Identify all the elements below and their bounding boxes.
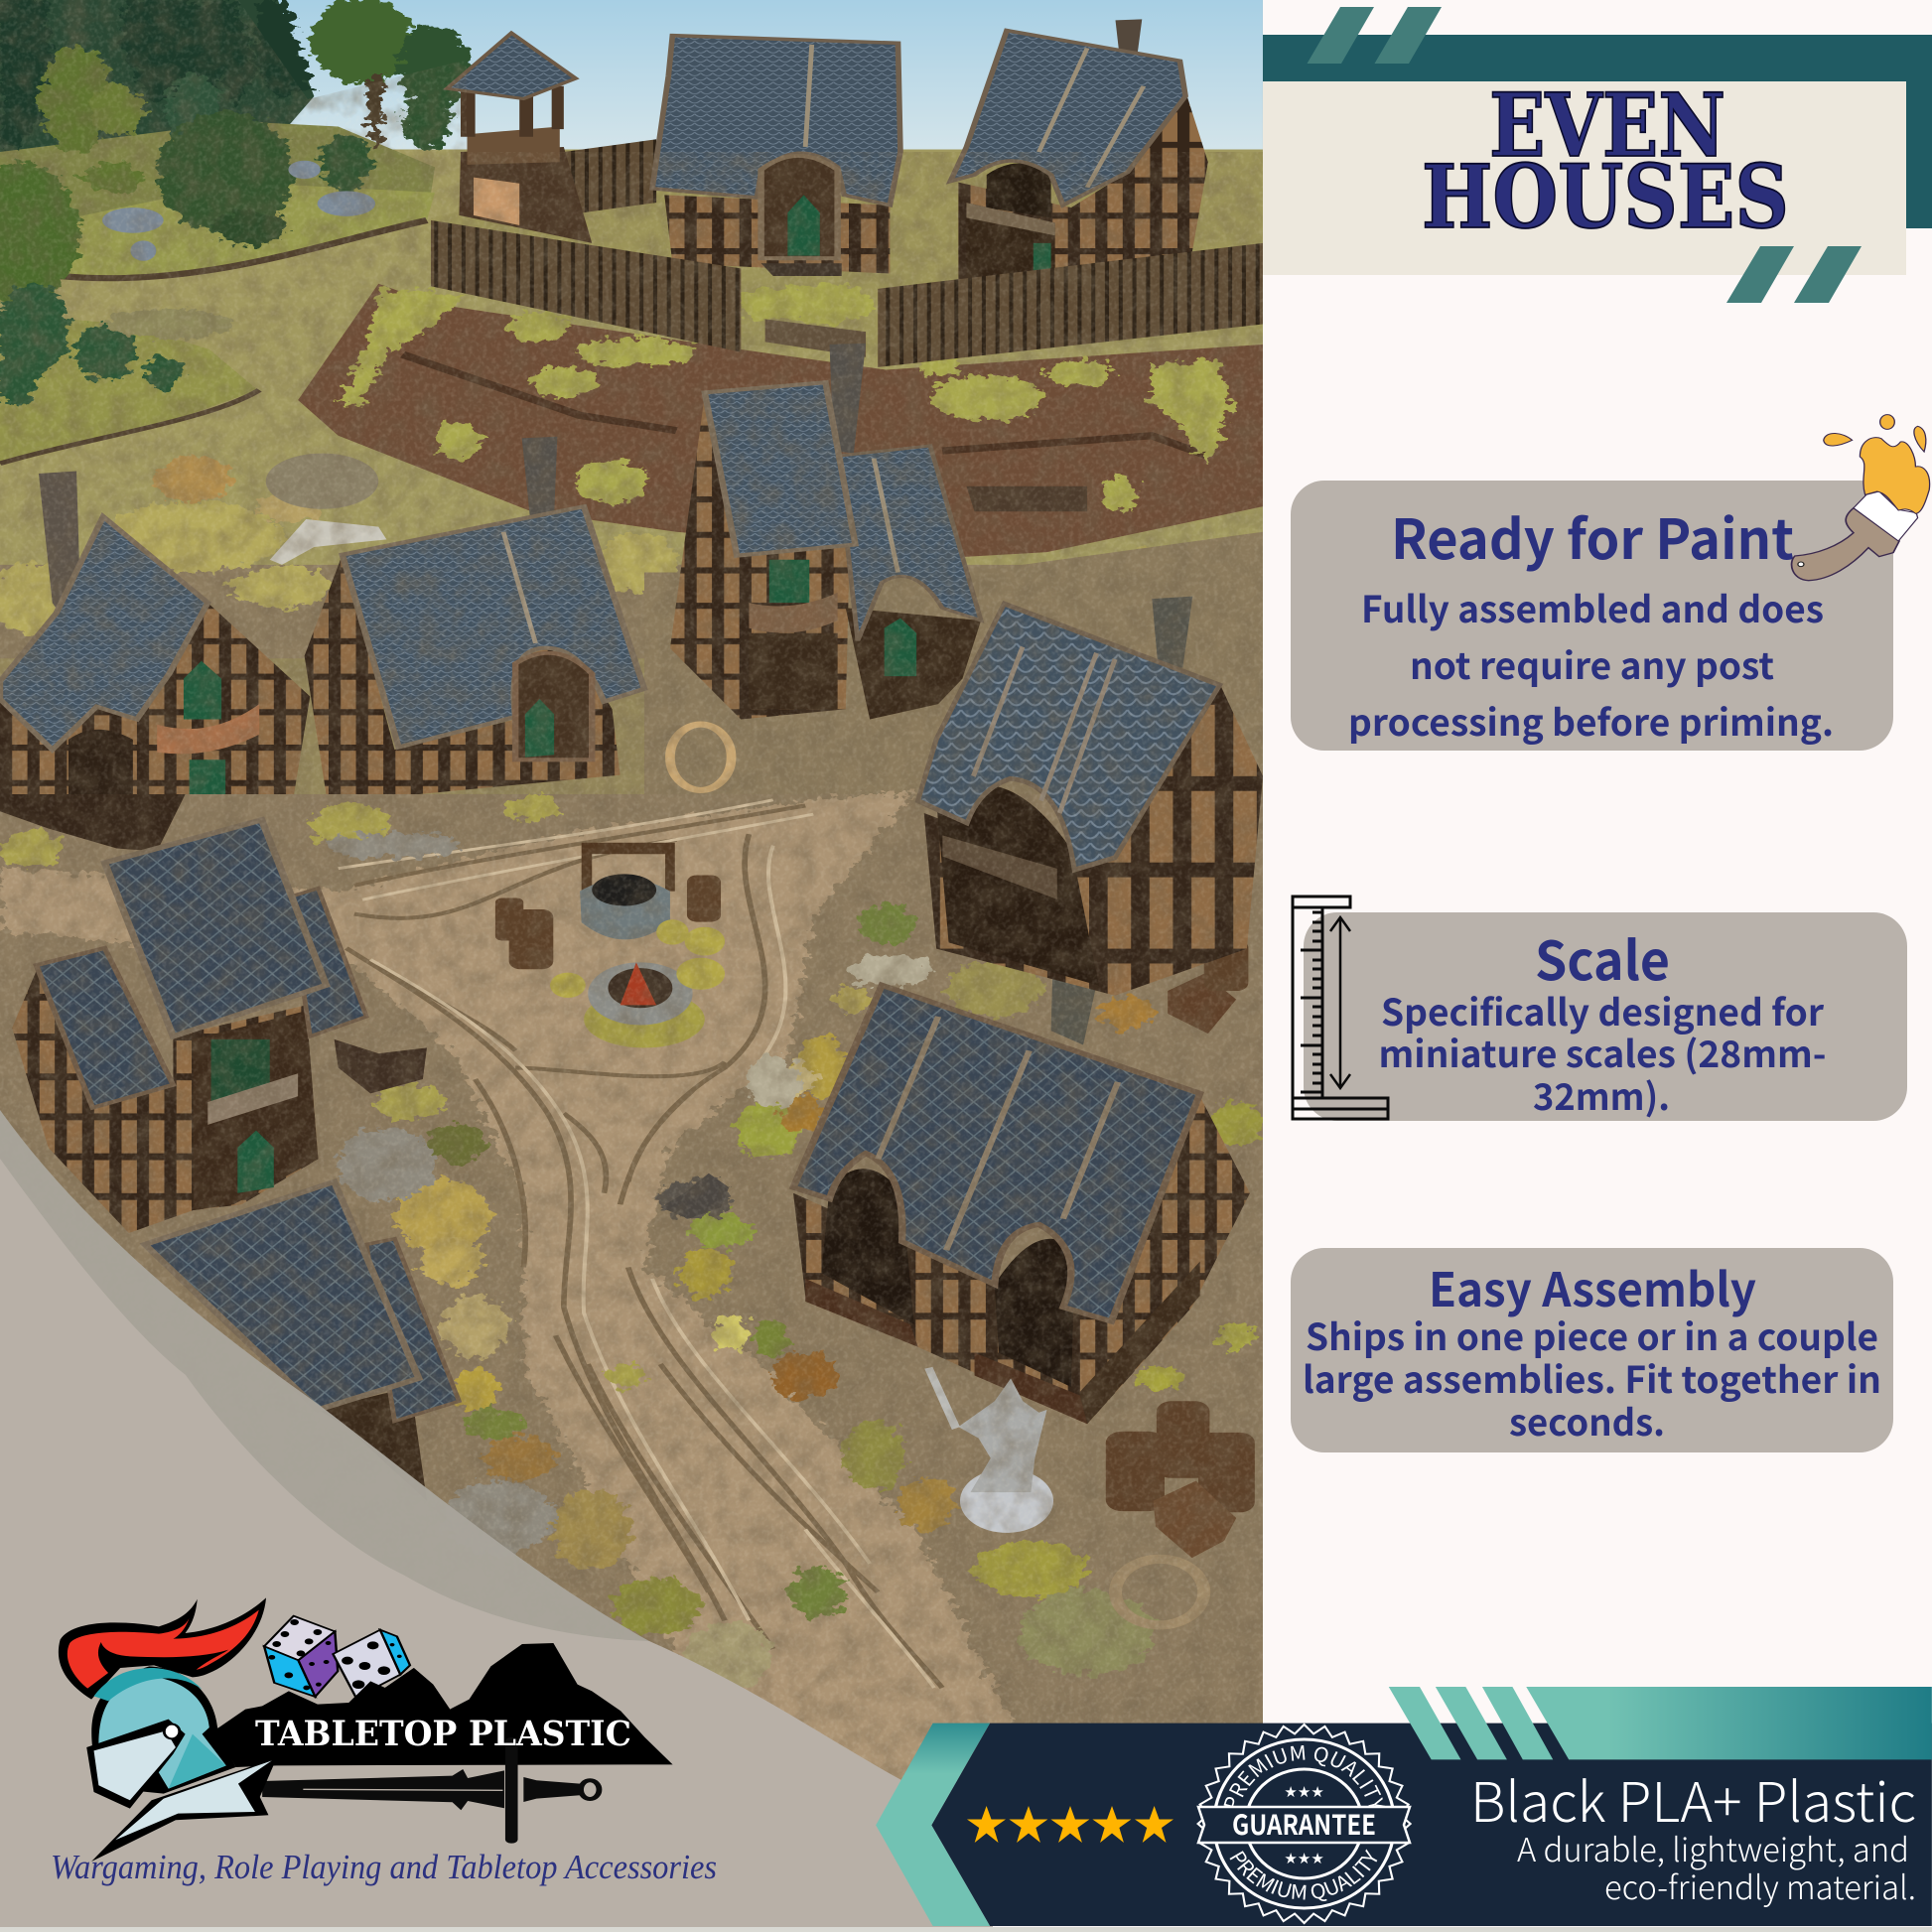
forest backdrop: [0, 0, 314, 152]
meadow patches: [0, 309, 1248, 755]
title line two: HOUSES: [1422, 145, 1789, 248]
lower-left grass bank: [0, 314, 258, 461]
fire grass: [584, 991, 705, 1047]
palisade left: [431, 220, 741, 352]
die two pips: [342, 1641, 402, 1689]
body text: 32mm).: [1533, 1067, 1670, 1121]
panel: easy assembly: [1291, 1248, 1893, 1452]
rope coil: [670, 725, 732, 790]
bottom banner: [0, 1687, 1932, 1932]
rear roof: [838, 446, 981, 640]
badge text bottom: PREMIUM QUALITY: [1229, 1849, 1378, 1901]
roof: [343, 506, 644, 748]
small stars top: ★★★: [1284, 1783, 1324, 1801]
house: back middle: [652, 36, 900, 276]
stones by road: [660, 1173, 729, 1219]
balcony: [157, 704, 259, 754]
tufts and stones: [0, 794, 1263, 1689]
walls: [793, 1096, 1250, 1424]
title banner: [1263, 7, 1932, 303]
miniature base: [960, 1469, 1053, 1533]
rear roof: [290, 889, 366, 1036]
body text: not require any post: [1410, 636, 1774, 690]
ground lower left: [0, 658, 644, 794]
back terrain and trees: [0, 0, 1263, 794]
die one left: [264, 1646, 315, 1697]
logo artwork: [59, 1597, 673, 1862]
photo: miniature village diorama: [0, 0, 1263, 1792]
body text: [1348, 580, 1834, 747]
paint: [1860, 438, 1930, 513]
door: [184, 661, 221, 719]
house: centre tall: [670, 344, 981, 719]
walls: [318, 1387, 427, 1501]
visor: [86, 1720, 186, 1809]
campfire: [584, 962, 705, 1047]
conifer trees: [0, 0, 313, 147]
helmet shell: [98, 1676, 226, 1789]
grass around well: [550, 919, 725, 998]
material description: A durable, lightweight, and: [1517, 1824, 1909, 1871]
arch and door: [515, 653, 592, 759]
barrels and crate: [1106, 1401, 1255, 1558]
ground tone: [0, 794, 1263, 1791]
sword blade: [262, 1769, 504, 1810]
balcony: [942, 835, 1057, 899]
yard inside palisade: [1263, 152, 1264, 157]
terrain noise: [0, 0, 1263, 1787]
walls: [0, 603, 310, 794]
solid swoosh: [0, 1159, 993, 1928]
earth mound: [298, 284, 1263, 557]
panel background: [1291, 481, 1893, 751]
plume red: [68, 1610, 259, 1689]
barrels by well: [495, 876, 721, 969]
heading: Scale: [1535, 917, 1670, 996]
house: upper right rear props: [1168, 974, 1236, 1034]
balcony: [207, 1073, 298, 1125]
material heading: Black PLA+ Plastic: [1470, 1758, 1916, 1838]
pommel: [581, 1780, 599, 1799]
walls: [958, 86, 1208, 291]
guarantee word: GUARANTEE: [1232, 1804, 1376, 1844]
brand name: TABLETOP PLASTIC: [255, 1714, 631, 1754]
well frame: [582, 843, 675, 892]
roof: [652, 36, 900, 206]
panel: ready for paint: [1291, 415, 1930, 751]
house: left centre: [305, 437, 644, 794]
die two: [333, 1630, 410, 1698]
heading: Ready for Paint: [1391, 495, 1794, 575]
sword guard: [505, 1737, 518, 1844]
brush handle: [1792, 508, 1899, 581]
arch: [761, 156, 838, 258]
die one pips: [268, 1619, 331, 1690]
corner swoosh: [0, 1110, 993, 1928]
road ruts: [346, 805, 942, 1688]
ground base: [0, 0, 1263, 1787]
rear roof: [366, 1239, 459, 1421]
well stone: [580, 879, 670, 939]
body text: large assemblies. Fit together in: [1303, 1350, 1881, 1404]
well: [580, 843, 675, 939]
house: lower left tall: [12, 820, 366, 1233]
wooded hill: [0, 121, 435, 304]
chimney: [39, 471, 80, 621]
die two front: [333, 1630, 400, 1698]
material description: eco-friendly material.: [1604, 1862, 1916, 1909]
mountain foreground: [337, 1668, 450, 1711]
pale rock: [270, 519, 386, 565]
serrated edge: [1198, 1725, 1411, 1923]
paint drops: [1824, 433, 1853, 446]
mound grass patches: [339, 284, 1232, 512]
roof: [918, 604, 1220, 870]
sword handle: [523, 1777, 580, 1802]
front roof: [705, 382, 855, 556]
walls: [924, 684, 1263, 996]
fine speckle: [0, 0, 1263, 1787]
heading: Easy Assembly: [1429, 1252, 1756, 1320]
teal stripes: [1389, 1687, 1553, 1759]
front village houses: [0, 344, 981, 794]
miniature body: [958, 1378, 1047, 1492]
front porch: [805, 1279, 1087, 1424]
banner plate: [1263, 81, 1906, 275]
die one right: [299, 1631, 338, 1697]
main roof: [145, 1181, 419, 1410]
roof: [793, 985, 1200, 1321]
bottom strip: [0, 1927, 1932, 1932]
road highlights: [339, 800, 934, 1688]
outer ring: [1214, 1739, 1395, 1908]
chimney: [830, 344, 866, 454]
left roof: [37, 948, 173, 1108]
top quote marks: [1307, 7, 1442, 64]
body text: processing before priming.: [1348, 693, 1834, 747]
doors: [769, 560, 809, 603]
mountains: [216, 1643, 673, 1767]
ruler ticks: [1301, 912, 1322, 1092]
main roof: [104, 820, 327, 1036]
ruler frame: [1293, 897, 1388, 1119]
translucent swoosh: [0, 1110, 993, 1928]
body text: seconds.: [1509, 1393, 1665, 1447]
palisade right: [878, 243, 1263, 367]
small stars bottom: ★★★: [1284, 1850, 1324, 1867]
watchtower: [447, 33, 592, 243]
grass slope: [49, 183, 435, 277]
chimney: [1116, 19, 1142, 56]
banner shapes: [876, 1687, 1932, 1926]
title line one: EVEN: [1489, 73, 1725, 177]
tower body: [459, 147, 592, 243]
door: [237, 1131, 274, 1193]
miniature figure: [924, 1367, 1053, 1533]
walls: [305, 555, 621, 794]
balcony: [966, 203, 1055, 235]
body text: [1378, 983, 1827, 1121]
miniature sword: [924, 1367, 960, 1430]
gravel right: [644, 532, 1263, 794]
panel: scale: [1293, 897, 1907, 1121]
banner teal band: [1263, 35, 1932, 228]
die one top: [264, 1616, 335, 1660]
lower village houses and props: [0, 794, 1263, 1689]
gravel piles: [327, 833, 930, 1555]
gravel patch: [266, 454, 378, 509]
teal bar: [1526, 1687, 1932, 1759]
bottom quote marks: [1726, 246, 1862, 303]
badge text top: PREMIUM QUALITY: [1223, 1745, 1385, 1806]
wing: [91, 1758, 277, 1862]
body text: Specifically designed for: [1381, 983, 1825, 1036]
chimney: [1152, 597, 1192, 668]
dark band: [931, 1724, 1932, 1926]
plume outline: [59, 1597, 266, 1700]
road and tracks: [0, 794, 1263, 1791]
logo: Tabletop Plastic: [51, 1597, 717, 1886]
ribbon: [1198, 1807, 1410, 1843]
tagline: Wargaming, Role Playing and Tabletop Accessories: [51, 1848, 717, 1886]
rocks on hill: [102, 161, 375, 261]
inner ring: [1246, 1769, 1362, 1878]
log steps: [765, 319, 866, 357]
dirt road: [0, 794, 1047, 1791]
rear wing wall: [846, 608, 981, 719]
panel background: [1291, 1248, 1893, 1452]
fire stones: [588, 962, 693, 1025]
far meadow: [0, 150, 1263, 565]
measuring arrow: [1330, 917, 1350, 1088]
body text: Ships in one piece or in a couple: [1306, 1308, 1878, 1361]
die two side: [380, 1630, 410, 1675]
tower roof: [447, 33, 576, 98]
teal chevron: [876, 1724, 990, 1926]
body text: Fully assembled and does: [1361, 580, 1824, 633]
walls: [664, 195, 890, 274]
body text: [1303, 1308, 1881, 1447]
rope coil: [1116, 1559, 1204, 1625]
house: far left: [0, 471, 310, 794]
barrels by house: [335, 1039, 427, 1093]
walls: [12, 971, 318, 1233]
walls: [670, 395, 850, 719]
lower far-left house walls: [0, 794, 186, 851]
body text: miniature scales (28mm-: [1378, 1025, 1827, 1078]
star rating: [967, 1806, 1173, 1843]
icon: ruler: [1293, 897, 1388, 1119]
chimney: [1051, 945, 1102, 1045]
bristles: [1854, 491, 1918, 541]
material description: [1517, 1824, 1916, 1909]
door: [787, 195, 820, 256]
balcony: [749, 593, 838, 633]
leafy trees: [0, 0, 472, 405]
guarantee badge: [1196, 1724, 1412, 1924]
house: front right: [793, 945, 1250, 1424]
house: right middle: [918, 597, 1263, 996]
die one: [264, 1616, 338, 1697]
house: back right: [950, 19, 1208, 291]
icon: paint brush: [1792, 415, 1930, 581]
chimney: [522, 437, 557, 516]
house: lower left front: [145, 1181, 459, 1501]
sky: [278, 0, 1263, 152]
roof: [0, 516, 207, 750]
flames: [621, 962, 656, 1005]
palisade back segment: [564, 139, 656, 215]
roof: [950, 31, 1185, 206]
panel background: [1304, 912, 1907, 1121]
helmet outline: [91, 1666, 236, 1794]
